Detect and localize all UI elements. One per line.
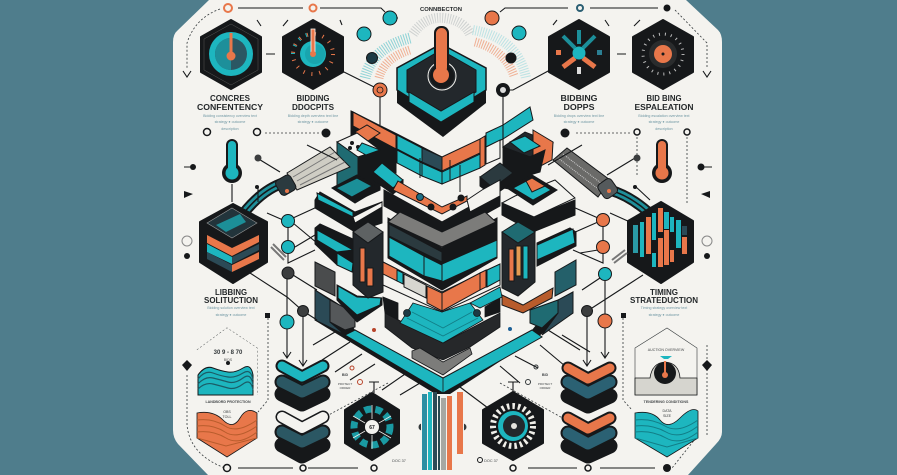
heading: bid bing espalization: BID BING	[646, 94, 682, 103]
icon: bar chart hexagon	[628, 202, 693, 283]
left house chart: teal waves: BIDS	[224, 358, 233, 362]
dotted arcs around central hub	[365, 18, 526, 78]
tower: upper right cube and slabs	[480, 130, 553, 196]
heading: bidding docpits: strategy ● outcome	[298, 120, 328, 124]
heading: bid bing espalization: ESPALEATION	[634, 103, 694, 112]
caption: tendering: TENDERING CONDITIONS	[644, 400, 689, 404]
heading: timing strateduction: Timing strategy overview text	[641, 306, 687, 310]
icon: gauge hexagon 3	[549, 20, 609, 89]
heading: concres confentency: strategy ● outcome	[215, 120, 245, 124]
left stripe tube	[243, 147, 350, 214]
top connector rows	[183, 4, 711, 77]
tower: upper left cube and slabs	[337, 125, 403, 200]
heading: bidbing dopps	[554, 94, 604, 124]
heading: concres confentency: Bidding consistency overview text	[203, 114, 257, 118]
small bottom labels: ORDER	[340, 386, 351, 390]
left house chart: orange waves: TOLL	[223, 415, 231, 419]
right house chart: gauge	[635, 328, 697, 395]
tower: left middle teal block	[315, 224, 355, 272]
icon: left thermometer	[222, 139, 242, 183]
left house chart: orange waves: OBS	[223, 410, 231, 414]
heading: libbing solitution: strategy ● outcome	[216, 313, 246, 317]
heading: bid bing espalization: Bidding escalation overview text	[638, 114, 690, 118]
right bar tower	[502, 222, 553, 313]
caption: landboro: LANDBORD PROTECTION	[205, 400, 251, 404]
heading: bidbing dopps: DOPPS	[564, 103, 595, 112]
icon: layered stack hexagon	[200, 204, 267, 283]
heading: bidding docpits: Bidding depth overview text line	[288, 114, 338, 118]
heading: bidding docpits: BIDDING	[296, 94, 330, 103]
small bottom labels: BID	[542, 373, 548, 377]
heading: bid bing espalization: strategy ● outcome	[649, 120, 679, 124]
small bottom labels: PROTECT	[538, 382, 552, 386]
icon: hexagon with teal petals	[345, 393, 399, 460]
heading: timing strateduction: STRATEDUCTION	[630, 296, 698, 305]
chevron stack: orange upper	[568, 368, 610, 406]
right corner wall	[530, 260, 576, 335]
icon: gauge hexagon 4	[633, 20, 693, 89]
heading: concres confentency: CONCRES	[210, 94, 251, 103]
heading: timing strateduction	[630, 288, 698, 317]
panel: main sheet	[173, 0, 722, 475]
tower: middle gray chevron	[388, 212, 497, 290]
heading: connection: CONNBECTON	[420, 7, 462, 13]
tower: right upper block	[502, 175, 575, 232]
chevron stack: orange lower	[568, 418, 610, 456]
tower: left upper block	[315, 175, 382, 232]
heading: concres confentency	[197, 94, 264, 131]
icon: hexagon with teal petals: 67	[369, 425, 375, 431]
connector nodes near hub	[357, 11, 526, 64]
heading: libbing solitution	[204, 288, 258, 317]
heading: concres confentency: description	[221, 127, 239, 131]
tower: orange and black shelf	[384, 158, 500, 238]
small bottom labels: BID	[342, 373, 348, 377]
central hub hexagon with thermometer	[397, 26, 486, 137]
icon: gauge hexagon 2	[283, 20, 343, 89]
left house chart: teal waves	[197, 328, 257, 395]
heading: concres confentency: CONFENTENCY	[197, 103, 264, 112]
right house chart: gauge: AUCTION OVERVIEW	[648, 348, 685, 352]
small bottom labels: DOC 37	[484, 459, 498, 463]
left house chart: orange waves	[197, 410, 257, 457]
icon: hexagon with gear	[483, 392, 543, 460]
base platform	[315, 262, 573, 398]
icon: right thermometer	[652, 139, 672, 183]
small bottom labels: DOC 37	[392, 459, 406, 463]
heading: timing strateduction: TIMING	[650, 288, 678, 297]
heading: bidding docpits	[288, 94, 338, 124]
connector lines and nodes	[182, 70, 712, 468]
heading: bid bing espalization	[634, 94, 694, 131]
heading: bidbing dopps: Bidding drops overview text line	[554, 114, 604, 118]
left house chart: teal waves: 30 9 - 8 70	[214, 350, 243, 356]
left bar tower	[337, 222, 383, 322]
right house chart: teal waves: SIZE	[663, 414, 672, 418]
icon: gauge hexagon 1	[201, 20, 261, 89]
chevron stack: white	[282, 417, 323, 456]
left corner wall	[315, 262, 355, 335]
tower: right middle teal block	[537, 228, 576, 266]
small bottom labels: PROTECT	[338, 382, 352, 386]
small bottom labels: ORDER	[540, 386, 551, 390]
right stripe tube	[553, 148, 648, 212]
heading: bidbing dopps: BIDBING	[560, 94, 598, 103]
bottom connector row	[224, 458, 671, 472]
central striped column	[421, 392, 464, 470]
heading: libbing solitution: SOLITUCTION	[204, 296, 258, 305]
tower: upper chevron band	[351, 107, 533, 184]
chevron stack: teal	[282, 366, 323, 404]
heading: bidbing dopps: strategy ● outcome	[564, 120, 594, 124]
right house chart: teal waves	[635, 409, 698, 457]
heading: bid bing espalization: description	[655, 127, 673, 131]
small bottom labels	[338, 365, 552, 463]
dotted V block with teal fabric	[383, 287, 502, 375]
heading: bidding docpits: DDOCPITS	[292, 103, 335, 112]
right house chart: teal waves: DATA	[662, 409, 672, 413]
heading: libbing solitution: Bidding solution overview text	[207, 306, 255, 310]
heading: timing strateduction: strategy ● outcome	[649, 313, 679, 317]
heading: libbing solitution: LIBBING	[215, 288, 247, 297]
tower: lower orange band	[383, 262, 500, 312]
